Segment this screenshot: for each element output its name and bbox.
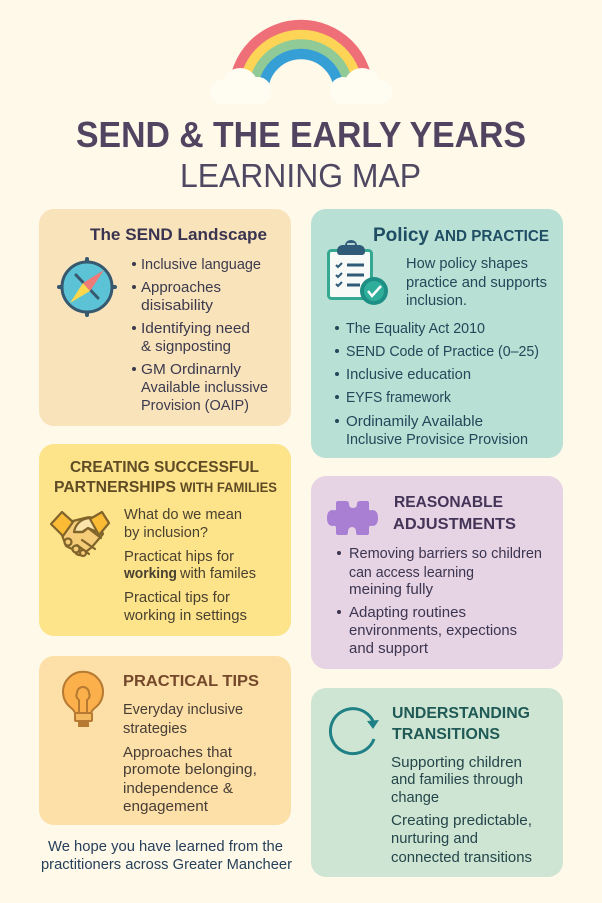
heading: Reasonable Adjustments: REASONABLE [394, 494, 503, 511]
title: SEND & THE EARLY YEARS [76, 114, 526, 155]
text: policy intro: How policy shapes [406, 255, 528, 272]
list: SEND Landscape topics: Identifying need [141, 320, 250, 337]
closing message: We hope you have learned from the [48, 838, 283, 855]
panel: Reasonable Adjustments [311, 476, 563, 669]
heading: Creating Successful Partnerships: WITH FAMILIES [180, 479, 277, 495]
heading: Understanding Transitions [392, 705, 530, 743]
closing message [41, 838, 292, 873]
heading: Creating Successful Partnerships: PARTNERSHIPS [54, 479, 176, 496]
text: partnership topics: working [123, 565, 177, 582]
closing message: practitioners across Greater Mancheer [41, 856, 292, 873]
list: adjustments: and support [349, 640, 429, 657]
text: policy intro: practice and supports [406, 274, 547, 291]
list: policy topics: EYFS framework [346, 389, 451, 406]
text: practical tip topics: Everyday inclusive [123, 701, 243, 718]
heading: Creating Successful Partnerships [54, 459, 277, 496]
list: adjustments [337, 545, 542, 657]
heading: Policy and Practice: Policy [373, 225, 429, 246]
text: partnership topics: with familes [179, 565, 256, 582]
list: adjustments: Adapting routines [349, 604, 466, 621]
text: transition topics [391, 754, 532, 866]
text: partnership topics [123, 506, 256, 624]
list: SEND Landscape topics: GM Ordinarnly [141, 361, 242, 378]
text: transition topics: and families through [391, 771, 523, 788]
text: practical tip topics: strategies [123, 720, 187, 737]
heading: Creating Successful Partnerships: CREATING SUCCESSFUL [70, 459, 259, 476]
list: SEND Landscape topics: Available inclussive [141, 379, 268, 396]
icon: compass [59, 259, 115, 315]
list: policy topics: Inclusive education [346, 366, 471, 383]
icon: rainbow with clouds [210, 25, 392, 104]
icon: puzzle piece [327, 501, 378, 535]
text: transition topics: Supporting children [391, 754, 522, 771]
icon: circular arrow [330, 709, 379, 754]
list: policy topics: The Equality Act 2010 [346, 320, 485, 337]
icon: light bulb [63, 672, 103, 727]
list: SEND Landscape topics: Inclusive language [141, 256, 261, 273]
heading: Reasonable Adjustments: ADJUSTMENTS [393, 516, 516, 533]
panel: Understanding Transitions [311, 688, 563, 877]
list: policy topics: SEND Code of Practice (0–25) [346, 343, 539, 360]
text: practical tip topics [123, 701, 257, 815]
text: partnership topics: by inclusion? [124, 524, 208, 541]
text: practical tip topics: independence & [123, 780, 233, 797]
text: policy intro: inclusion. [406, 292, 467, 309]
list: policy topics [335, 320, 539, 448]
list: SEND Landscape topics: Provision (OAIP) [141, 397, 249, 414]
text: transition topics: change [391, 789, 439, 806]
list: adjustments: can access learning [349, 564, 474, 581]
heading: The SEND Landscape: The SEND Landscape [90, 225, 267, 244]
text: partnership topics: working in settings [123, 607, 247, 624]
title [76, 114, 526, 194]
text: partnership topics: Practicat hips for [124, 548, 234, 565]
list: SEND Landscape topics: Approaches [141, 279, 221, 296]
text: partnership topics: What do we mean [124, 506, 242, 523]
title: LEARNING MAP [180, 157, 421, 194]
list: adjustments: meining fully [349, 581, 434, 598]
icon: handshake [51, 512, 109, 556]
text: partnership topics: Practical tips for [124, 589, 230, 606]
text: transition topics: nurturing and [391, 830, 478, 847]
text: practical tip topics: engagement [123, 798, 209, 815]
list: adjustments: environments, expections [349, 622, 517, 639]
heading: Understanding Transitions: UNDERSTANDING [392, 705, 530, 722]
panel: Practical Tips [39, 656, 291, 825]
heading: Policy and Practice: AND PRACTICE [434, 228, 549, 245]
text: practical tip topics: Approaches that [123, 744, 233, 761]
list: SEND Landscape topics: disisability [141, 297, 214, 314]
text: transition topics: Creating predictable, [391, 812, 532, 829]
heading: Policy and Practice [373, 225, 549, 246]
panel: The SEND Landscape [39, 209, 291, 426]
text: practical tip topics: promote belonging, [123, 761, 257, 778]
heading: Practical Tips: PRACTICAL TIPS [123, 673, 259, 690]
panel: Policy and Practice [311, 209, 563, 458]
text: transition topics: connected transitions [391, 849, 532, 866]
list: SEND Landscape topics [132, 256, 268, 414]
panel: Creating Successful Partnerships with Families [39, 444, 291, 636]
heading: Reasonable Adjustments [393, 494, 516, 533]
icon: clipboard with check [328, 240, 388, 305]
text: policy intro [406, 255, 547, 309]
list: policy topics: Inclusive Provisice Provision [346, 431, 528, 448]
list: SEND Landscape topics: & signposting [141, 338, 231, 355]
list: adjustments: Removing barriers so children [349, 545, 542, 562]
heading: Understanding Transitions: TRANSITIONS [392, 726, 500, 743]
list: policy topics: Ordinamily Available [346, 413, 483, 430]
